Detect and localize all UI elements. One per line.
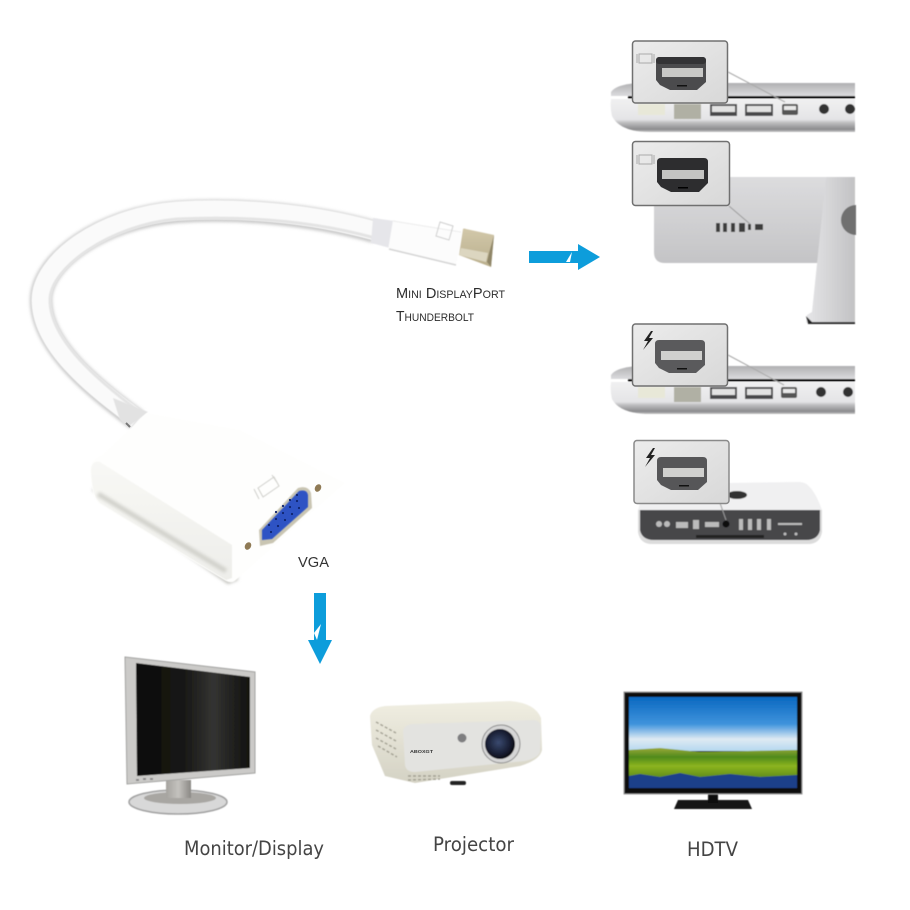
projector xyxy=(370,701,542,785)
label: Thunderbolt: Thunderbolt xyxy=(396,308,474,325)
macbook with mini displayport xyxy=(611,72,855,132)
label: Projector: Projector xyxy=(433,833,515,856)
macbook with thunderbolt xyxy=(611,355,855,414)
vga port xyxy=(259,487,312,546)
arrow: right to computers xyxy=(529,244,600,270)
strain relief: plug end xyxy=(371,218,395,248)
label: Mini DisplayPort: Mini DisplayPort xyxy=(396,285,505,302)
adapter cable xyxy=(41,210,395,427)
inset: thunderbolt on mac mini xyxy=(634,440,729,504)
label: VGA: VGA xyxy=(298,554,329,571)
vga adapter box xyxy=(90,413,345,584)
projector brand mark: ABOXGT xyxy=(410,749,433,754)
label: HDTV: HDTV xyxy=(687,838,739,861)
inset: mini displayport on imac xyxy=(632,142,730,206)
monitor xyxy=(125,657,255,814)
mini displayport plug xyxy=(388,220,494,267)
inset: mini displayport on macbook xyxy=(632,41,728,103)
inset: thunderbolt on macbook xyxy=(632,324,728,386)
label: Monitor/Display: Monitor/Display xyxy=(184,837,324,860)
mac mini xyxy=(638,482,822,544)
imac with mini displayport xyxy=(654,177,856,324)
hdtv xyxy=(624,692,802,809)
strain relief: box end xyxy=(113,398,148,427)
arrow: down to displays xyxy=(308,593,332,664)
